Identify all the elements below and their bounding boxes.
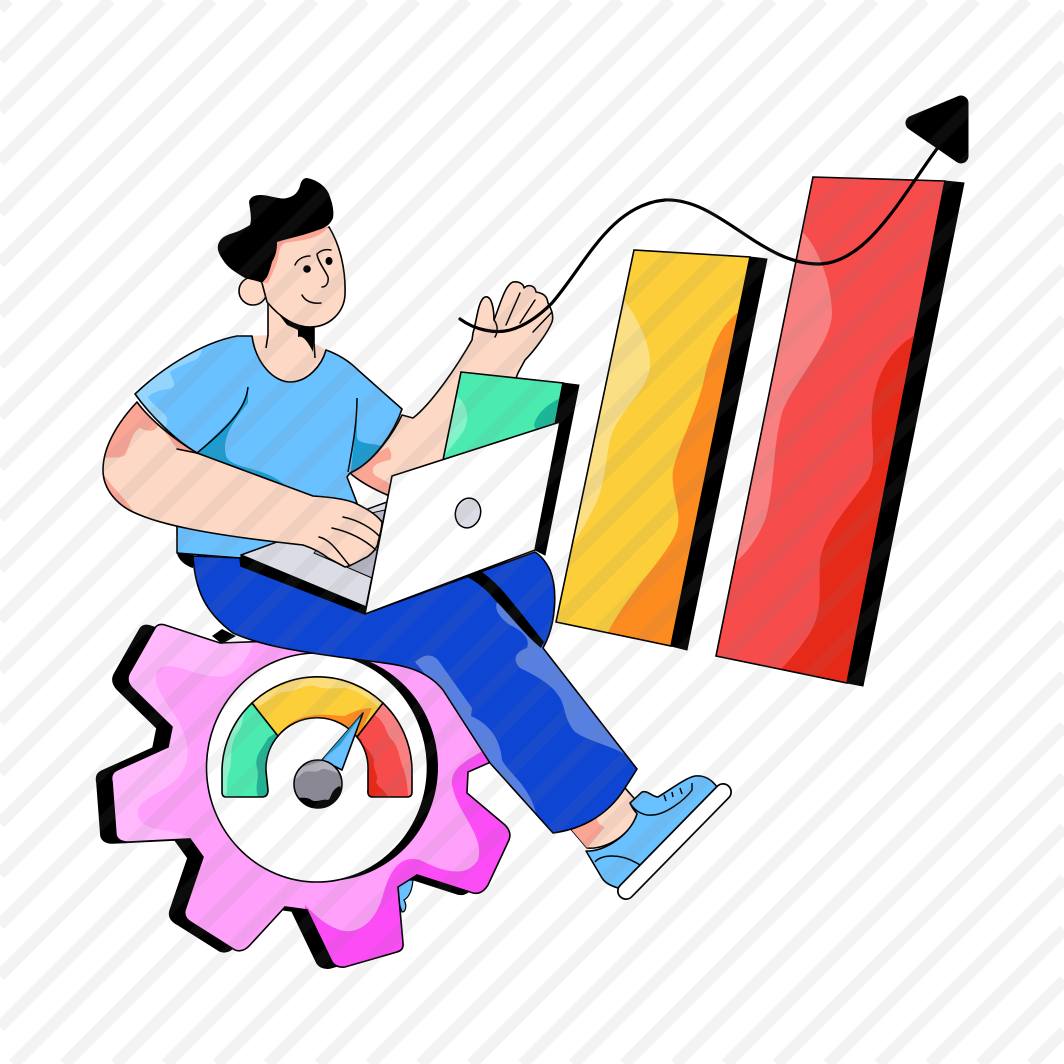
trousers (193, 552, 640, 840)
gauge needle (322, 713, 363, 770)
bar chart: yellow bar (540, 250, 770, 660)
tick behind gear (212, 629, 236, 644)
brows, nose and mouth (295, 250, 331, 303)
laptop screen back (440, 372, 579, 555)
gauge: red segment (355, 700, 416, 800)
laptop base (241, 502, 387, 614)
gauge: green segment (221, 702, 279, 798)
ear (239, 277, 267, 305)
foot behind gear (398, 880, 413, 912)
rising trend line with arrow (460, 103, 961, 332)
front arm and hand (98, 395, 382, 567)
shirt hem shadow (177, 553, 193, 568)
laptop lid (365, 422, 560, 614)
neck (252, 300, 326, 382)
elbow crease and finger lines (177, 449, 380, 566)
gear with speedometer (96, 624, 511, 969)
shoe (586, 776, 723, 891)
gear centre hole (216, 653, 438, 881)
face (262, 227, 345, 327)
shoe sole (626, 792, 723, 891)
t-shirt (125, 336, 402, 568)
shirt fold lines (197, 387, 357, 472)
gear tone waves (112, 625, 510, 966)
hair (218, 178, 333, 283)
keyboard (314, 510, 385, 578)
far arm and hand (345, 282, 553, 505)
hairline shade (262, 226, 329, 283)
finger lines (494, 293, 552, 337)
gauge knob (293, 759, 343, 809)
trousers crease shadow (467, 572, 544, 648)
ankle (570, 788, 640, 848)
gauge: yellow segment (251, 676, 384, 738)
gear shadow (97, 625, 495, 968)
head (218, 178, 345, 327)
eyes (303, 257, 332, 273)
gear body (112, 624, 510, 967)
lid logo (452, 495, 484, 531)
arrow head (913, 103, 961, 156)
bar chart: tall red bar (700, 177, 964, 700)
